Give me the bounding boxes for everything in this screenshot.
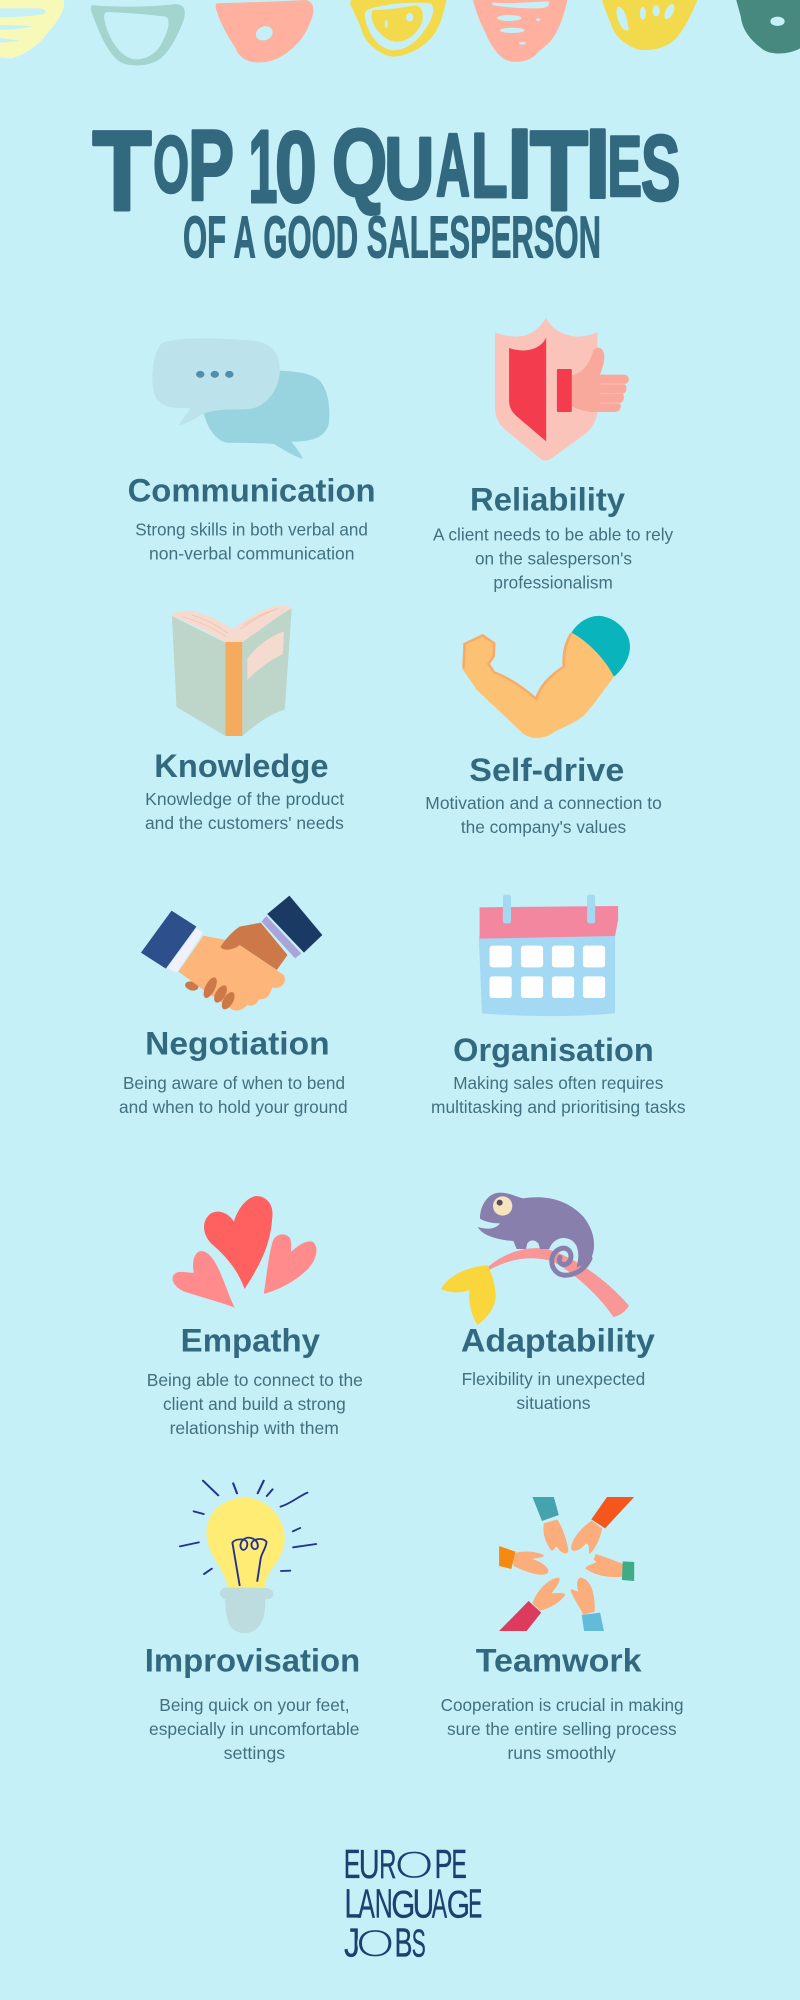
heading: Organisation [453,1032,654,1068]
description [145,789,344,833]
description [431,1073,686,1117]
description [425,793,662,837]
logo: Europe Language Jobs: B [394,1921,413,1966]
panel: improvisation [145,1481,360,1763]
logo: Europe Language Jobs: S [412,1922,426,1965]
logo: Europe Language Jobs: P [434,1843,453,1887]
logo: Europe Language Jobs: O [394,1843,434,1887]
logo: Europe Language Jobs: G [391,1883,415,1926]
description [147,1370,363,1438]
description: the company's values [461,817,626,837]
description [149,1695,359,1763]
title: 0 [275,111,317,223]
heading: Empathy [181,1322,320,1358]
title: T [530,109,588,235]
panel: knowledge [145,605,344,833]
heading: Knowledge [154,748,328,784]
title: U [384,119,435,217]
icon: shield with hand [495,318,629,460]
icon: hearts [173,1196,317,1308]
logo: Europe Language Jobs [344,1841,482,1966]
description: Cooperation is crucial in making [441,1695,684,1715]
title [92,109,680,235]
icon: handshake [141,896,322,1011]
heading: Self-drive [469,752,624,788]
description: non-verbal communication [149,543,354,563]
description: client and build a strong [163,1394,346,1414]
panel: self-drive [425,616,662,837]
description: on the salesperson's [475,548,632,568]
panel: communication [128,338,376,563]
logo: Europe Language Jobs: U [413,1880,434,1927]
logo: Europe Language Jobs: O [356,1921,395,1965]
title: O [153,118,189,209]
logo: Europe Language Jobs: G [447,1884,470,1926]
description: sure the entire selling process [447,1719,677,1739]
logo: Europe Language Jobs: E [452,1842,467,1888]
panel: reliability [433,318,673,592]
title: I [507,110,533,219]
description: runs smoothly [508,1743,616,1763]
panel: adaptability [441,1193,655,1413]
icon: circle of hands [499,1497,634,1631]
title: P [188,110,234,222]
title: I [585,110,611,219]
logo: Europe Language Jobs: U [359,1841,380,1887]
description [441,1695,684,1763]
logo: Europe Language Jobs: A [432,1882,448,1927]
description: Flexibility in unexpected [462,1369,645,1389]
logo: Europe Language Jobs: R [379,1843,396,1888]
title: Q [332,109,387,216]
description [135,519,368,563]
description: Strong skills in both verbal and [135,519,368,539]
title: A [436,117,470,216]
icon: book [172,605,292,736]
description: relationship with them [170,1418,339,1438]
title: S [641,116,680,220]
description [462,1369,645,1413]
title: L [471,115,508,217]
description: Motivation and a connection to [425,793,662,813]
icon: flexed arm [462,616,630,738]
logo: Europe Language Jobs: L [344,1881,360,1927]
description: especially in uncomfortable [149,1719,359,1739]
description: Making sales often requires [453,1073,664,1093]
icon: chameleon on branch [441,1193,629,1325]
description: situations [516,1393,591,1413]
title: 1 [248,110,277,225]
description [433,524,673,592]
description: and when to hold your ground [119,1097,348,1117]
logo: Europe Language Jobs: E [468,1881,482,1926]
panel: organisation [431,895,686,1117]
description: Knowledge of the product [145,789,344,809]
description: A client needs to be able to rely [433,524,673,544]
heading: Adaptability [461,1322,655,1358]
title: E [607,120,642,215]
description: Being quick on your feet, [159,1695,350,1715]
logo: Europe Language Jobs: A [358,1881,375,1927]
description: Being aware of when to bend [123,1073,345,1093]
logo: Europe Language Jobs: N [375,1881,393,1927]
panel: negotiation [119,896,348,1117]
icon: speech bubbles [152,338,329,459]
description: Being able to connect to the [147,1370,363,1390]
heading: Reliability [470,482,625,518]
logo: Europe Language Jobs: J [344,1920,360,1965]
description: professionalism [493,572,613,592]
heading: Teamwork [476,1642,642,1678]
decorative top shapes banner [0,0,800,65]
panel: teamwork [441,1497,684,1763]
heading: Negotiation [145,1026,330,1062]
heading: Improvisation [145,1642,360,1678]
description [119,1073,348,1117]
description: settings [224,1743,285,1763]
description: and the customers' needs [145,813,344,833]
icon: light bulb [180,1481,316,1633]
description: multitasking and prioritising tasks [431,1097,686,1117]
heading: Communication [128,473,376,509]
logo: Europe Language Jobs: E [344,1842,360,1888]
panel: empathy [147,1196,363,1438]
icon: calendar [479,895,618,1016]
title: T [92,109,152,235]
